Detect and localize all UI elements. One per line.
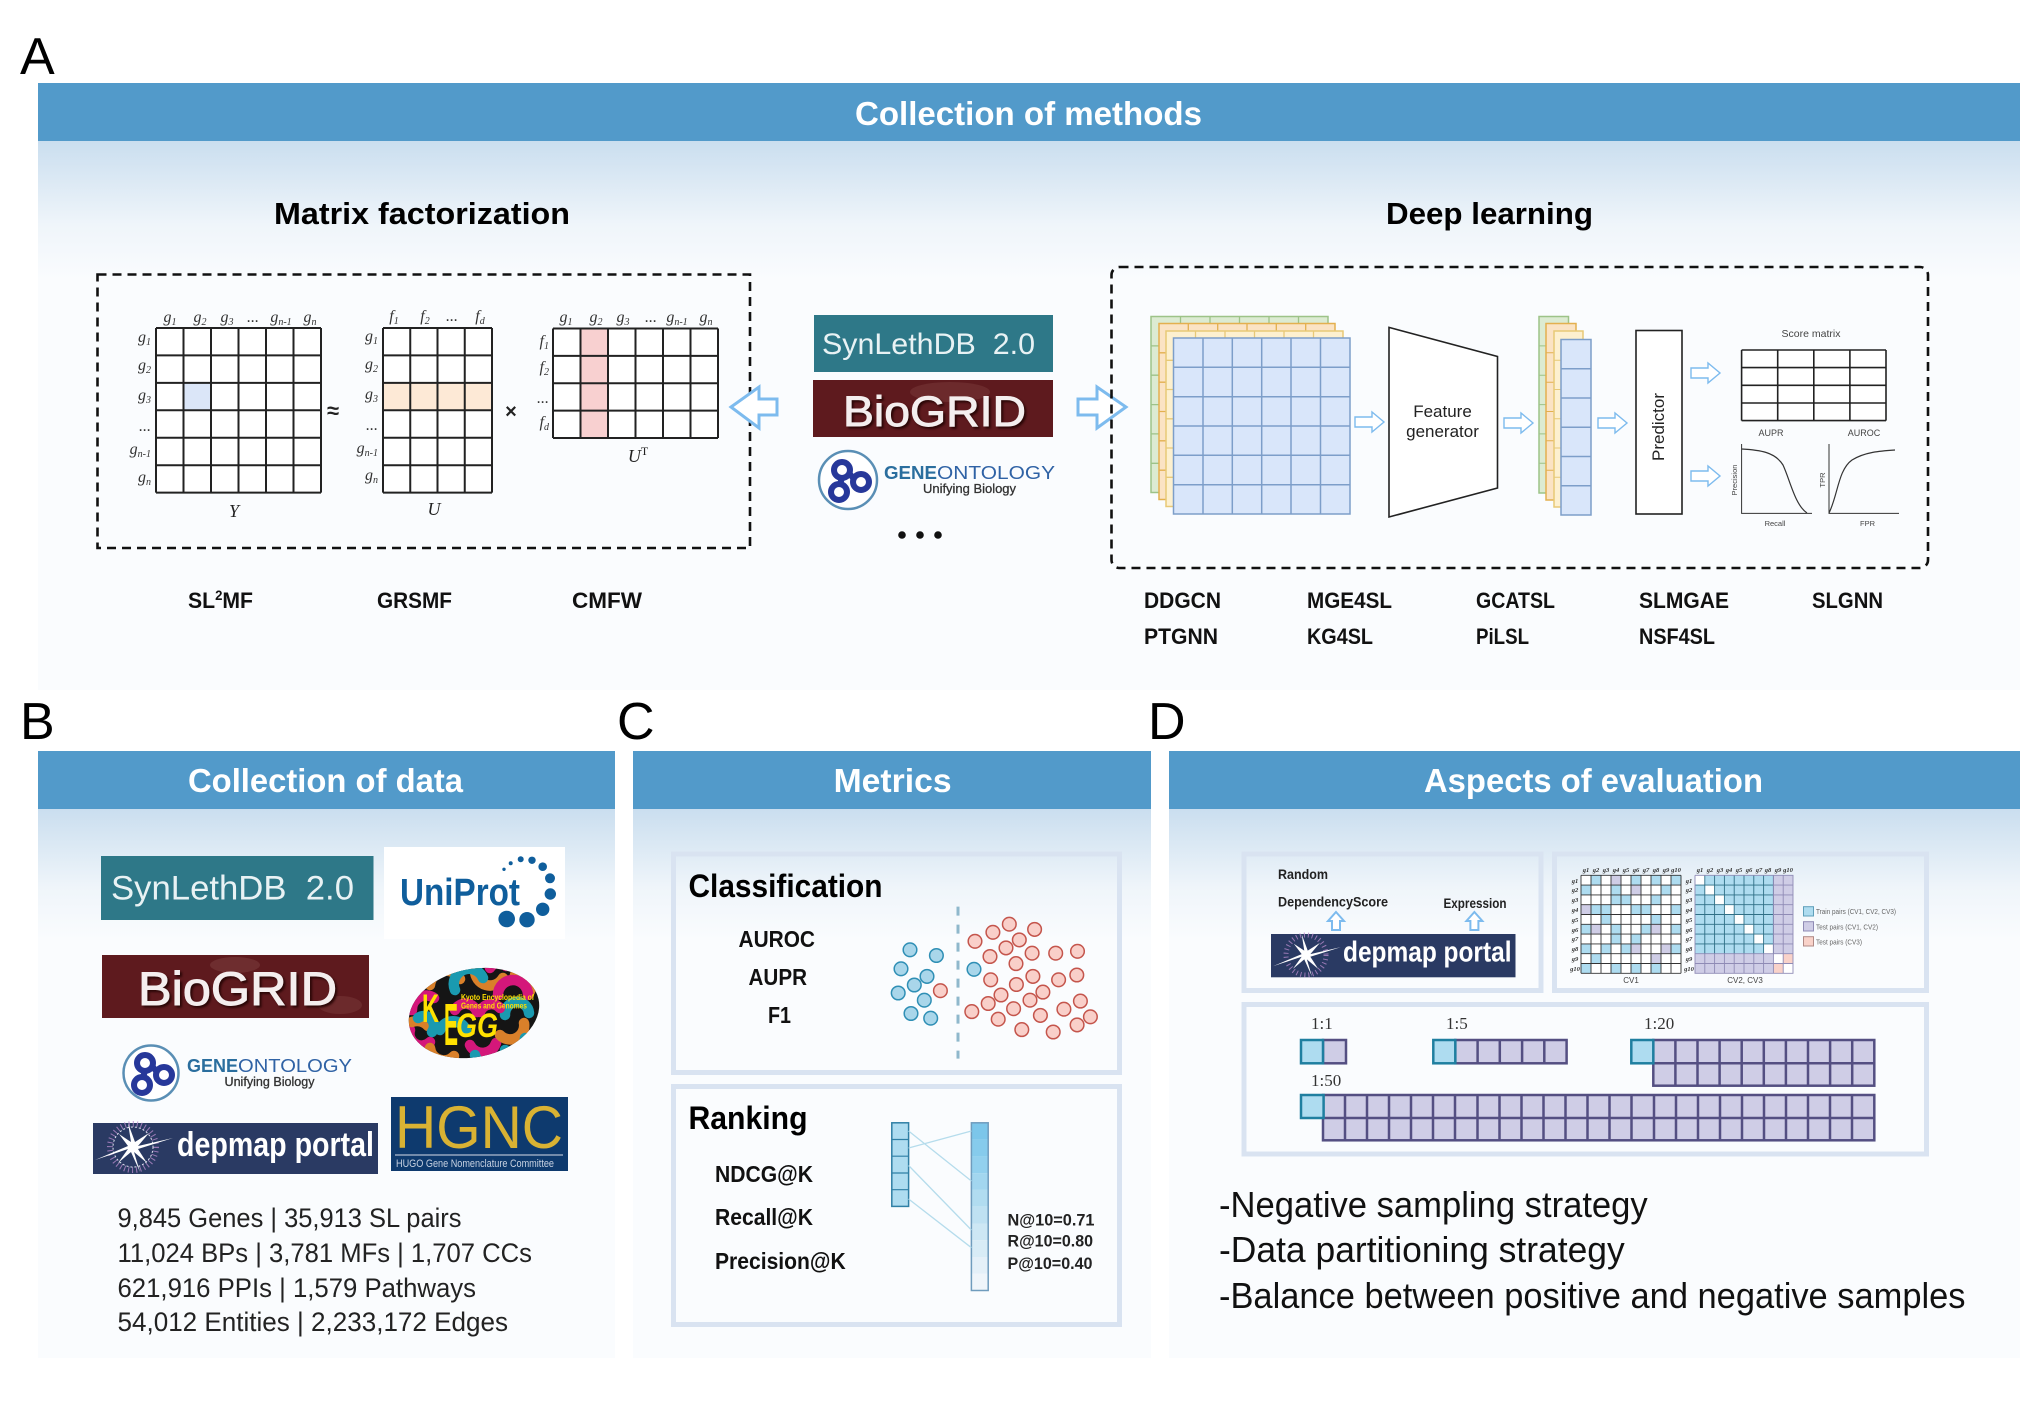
panel C: metrics	[633, 751, 1151, 1358]
matrix CV1: g8	[1652, 867, 1660, 874]
score matrix: Score matrix	[1782, 328, 1841, 340]
ratio 1:5	[1433, 1014, 1567, 1063]
matrix CV2 and CV3: g2	[1706, 867, 1714, 874]
ratio 1:20: 1:20	[1644, 1014, 1674, 1033]
matrix CV1: g10	[1569, 966, 1581, 973]
panel D: aspects of evaluation	[1169, 751, 2020, 1358]
legend: Test pairs (CV1, CV2)	[1816, 922, 1878, 932]
logo: SynLethDB	[101, 856, 374, 920]
matrix CV1	[1569, 867, 1682, 985]
matrix CV2 and CV3: g6	[1685, 927, 1693, 934]
logo: HGNC: HGNC	[395, 1094, 563, 1161]
logo: BioGRID in panel A: BioGRID	[843, 388, 1026, 436]
panel label B: B	[20, 693, 55, 751]
matrix U transpose: g	[700, 309, 708, 326]
logo: SynLethDB in panel A	[814, 315, 1053, 372]
matrix CV2 and CV3: g7	[1755, 867, 1763, 874]
ratio 1:1: 1:1	[1311, 1014, 1333, 1033]
box: negative sampling sources	[1244, 854, 1541, 990]
ranking metric values	[1008, 1211, 1094, 1273]
matrix U: U	[428, 499, 442, 519]
ranking metric names: Recall@K	[715, 1204, 813, 1230]
ratio 1:5: 1:5	[1446, 1014, 1468, 1033]
logo: depmap portal: depmap portal	[177, 1126, 374, 1164]
matrix U transpose: d	[544, 422, 550, 433]
matrix CV2 and CV3: g7	[1685, 936, 1693, 943]
matrix U: g	[365, 328, 373, 345]
ratio 1:50: 1:50	[1311, 1071, 1341, 1090]
legend: Train pairs (CV1, CV2, CV3)	[1816, 907, 1896, 916]
matrix Y: g	[138, 329, 146, 346]
multiplication sign: ×	[505, 401, 517, 423]
panel A: collection of methods	[38, 83, 2020, 690]
matrix CV1: g9	[1571, 956, 1579, 963]
matrix CV1: g5	[1622, 867, 1630, 874]
matrix U transpose: g	[666, 309, 674, 326]
classification metric names	[738, 926, 815, 1028]
matrix CV2 and CV3: g4	[1725, 867, 1733, 874]
classification metric names: AUROC	[738, 926, 815, 952]
matrix U: d	[480, 316, 486, 327]
ranking box: Ranking	[688, 1100, 808, 1136]
stacked feature matrices	[1151, 316, 1350, 514]
feature generator trapezoid	[1389, 327, 1498, 517]
matrix CV2 and CV3: g9	[1685, 956, 1693, 963]
matrix U transpose: f	[540, 414, 544, 431]
deep learning method names: NSF4SL	[1639, 624, 1715, 649]
ratio 1:20	[1631, 1014, 1874, 1086]
dashed box: deep learning diagram	[1112, 267, 1928, 568]
matrix U transpose: 1	[568, 317, 572, 328]
matrix Y: g	[138, 357, 146, 374]
logo: depmap portal	[93, 1123, 378, 1174]
matrix U: g	[365, 467, 373, 484]
matrix Y: 2	[202, 317, 206, 328]
logo: Gene Ontology in panel A: ONTOLOGY	[937, 462, 1055, 483]
matrix U transpose: ...	[645, 309, 657, 326]
matrix U transpose: n-1	[674, 317, 688, 328]
matrix CV1: g6	[1632, 867, 1640, 874]
logo: depmap portal: depmap portal	[1343, 937, 1512, 969]
logo: KEGG: E	[444, 992, 458, 1058]
up arrow to dependency score	[1328, 912, 1344, 930]
matrix factorization method names: MF	[222, 588, 253, 613]
ellipsis dots	[898, 531, 942, 539]
matrix Y: g	[194, 309, 202, 326]
matrix CV2 and CV3: g5	[1685, 917, 1693, 924]
ranking metric values: N@10=0.71	[1008, 1211, 1094, 1229]
matrix CV1: g4	[1612, 867, 1620, 874]
ranking metric names	[715, 1161, 846, 1274]
arrow: data to deep learning	[1078, 387, 1126, 428]
AUROC chart: TPR	[1818, 472, 1827, 488]
deep learning method names: SLMGAE	[1639, 588, 1729, 613]
matrix U transpose: 1	[544, 341, 549, 352]
matrix Y: 1	[172, 317, 176, 328]
classification metric names: F1	[768, 1002, 791, 1028]
heading: matrix factorization: Matrix factorization	[274, 196, 570, 231]
classification metric names: AUPR	[748, 964, 807, 990]
header bar: collection of methods: Collection of methods	[855, 95, 1202, 132]
matrix CV2 and CV3: g4	[1685, 907, 1693, 914]
matrix U transpose: ...	[537, 390, 549, 407]
data statistics: 9,845 Genes | 35,913 SL pairs	[118, 1203, 462, 1233]
matrix Y: n	[146, 477, 151, 488]
matrix CV1: g4	[1571, 907, 1579, 914]
matrix U transpose: g	[560, 309, 568, 326]
dashed box: matrix factorization diagram	[98, 274, 750, 548]
approximately equal sign: ≈	[327, 398, 339, 423]
header bar: metrics	[633, 751, 1151, 809]
logo: Gene Ontology in panel A	[819, 451, 1055, 509]
matrix CV2 and CV3: g10	[1683, 966, 1695, 973]
matrix factorization method names: SL	[188, 588, 217, 613]
deep learning method names: PTGNN	[1144, 624, 1218, 649]
AUPR chart: AUPR	[1758, 428, 1784, 438]
feature generator trapezoid: generator	[1406, 422, 1479, 441]
matrix CV2 and CV3: g2	[1685, 887, 1693, 894]
classification box: Classification	[688, 868, 882, 904]
predictor box: Predictor	[1649, 393, 1668, 461]
matrix CV2 and CV3: g8	[1685, 946, 1693, 953]
up arrow to expression	[1466, 912, 1482, 930]
matrix factorization method names: GRSMF	[377, 588, 452, 613]
matrix CV2 and CV3: CV2, CV3	[1727, 976, 1763, 985]
panel label A: A	[20, 28, 55, 86]
matrix U transpose: f	[540, 359, 544, 376]
matrix CV1: g3	[1571, 897, 1579, 904]
AUPR chart: Precision	[1730, 465, 1739, 495]
logo: depmap portal	[1271, 934, 1516, 977]
logo: Gene Ontology: Unifying Biology	[224, 1075, 315, 1089]
logo: SynLethDB in panel A: SynLethDB 2.0	[822, 328, 1035, 361]
panel B: collection of data	[38, 751, 615, 1358]
matrix Y: g	[220, 309, 228, 326]
ratio 1:50	[1301, 1071, 1874, 1140]
ranking box	[674, 1086, 1120, 1324]
matrix U: 1	[394, 316, 399, 327]
matrix U: ...	[366, 417, 378, 434]
logo: KEGG: GG	[456, 1007, 498, 1045]
matrix U: 2	[425, 316, 430, 327]
data statistics	[118, 1203, 532, 1337]
header bar: collection of methods	[38, 83, 2020, 141]
deep learning method names: GCATSL	[1476, 588, 1555, 613]
deep learning method names	[1144, 588, 1883, 649]
matrix CV2 and CV3: g8	[1764, 867, 1772, 874]
matrix CV2 and CV3: g3	[1685, 897, 1693, 904]
matrix CV1: g6	[1571, 927, 1579, 934]
evaluation aspects list	[1219, 1184, 1966, 1316]
matrix Y: g	[164, 309, 172, 326]
matrix Y: g	[270, 309, 278, 326]
matrix U transpose: f	[540, 333, 544, 350]
matrix CV1: g5	[1571, 917, 1579, 924]
panel label C: C	[617, 693, 655, 751]
matrix U transpose: n	[708, 317, 712, 328]
matrix U: n	[373, 475, 378, 486]
AUPR chart: Recall	[1765, 519, 1786, 528]
matrix U: g	[365, 386, 373, 403]
matrix CV1: g1	[1582, 867, 1589, 874]
matrix U transpose	[537, 309, 718, 466]
logo: Gene Ontology in panel A: GENE	[884, 462, 937, 483]
matrix Y: g	[304, 309, 312, 326]
small arrow from feature generator	[1504, 413, 1533, 433]
matrix factorization method names: CMFW	[572, 588, 643, 613]
matrix U transpose: 2	[598, 317, 602, 328]
matrix U: n-1	[365, 448, 378, 459]
box: positive to negative ratios	[1244, 1004, 1926, 1154]
matrix CV2 and CV3: g9	[1774, 867, 1782, 874]
deep learning method names: PiLSL	[1476, 624, 1529, 649]
matrix U: f	[389, 308, 394, 325]
matrix CV1: g7	[1642, 867, 1650, 874]
box: negative sampling sources: Random	[1278, 866, 1328, 882]
header bar: collection of data	[38, 751, 615, 809]
deep learning method names: DDGCN	[1144, 588, 1221, 613]
matrix U transpose: g	[616, 309, 624, 326]
heading: deep learning: Deep learning	[1386, 196, 1593, 231]
logo: Gene Ontology: GENE	[187, 1056, 238, 1076]
matrix Y: g	[130, 441, 138, 458]
matrix Y	[130, 309, 321, 521]
header bar: aspects of evaluation	[1169, 751, 2020, 809]
matrix U transpose: g	[590, 309, 598, 326]
matrix factorization method names	[188, 587, 643, 613]
matrix CV1: CV1	[1623, 976, 1639, 985]
score matrix	[1742, 328, 1886, 421]
classification box	[674, 854, 1120, 1072]
logo: Gene Ontology in panel A: Unifying Biology	[923, 482, 1017, 496]
AUROC chart: FPR	[1860, 519, 1876, 528]
logo: UniProt	[384, 847, 565, 939]
arrow: data to matrix factorization	[731, 387, 777, 428]
matrix CV2 and CV3: g1	[1685, 878, 1692, 885]
matrix Y: Y	[229, 501, 241, 521]
AUROC chart: AUROC	[1848, 428, 1881, 438]
evaluation aspects list: -Negative sampling strategy	[1219, 1184, 1648, 1225]
matrix Y: 1	[146, 337, 151, 348]
matrix Y: 3	[228, 317, 234, 328]
matrix U: f	[475, 308, 480, 325]
matrix U transpose: U	[628, 446, 641, 466]
panel label D: D	[1148, 693, 1186, 751]
ratio 1:1	[1301, 1014, 1346, 1063]
matrix CV1: g10	[1670, 867, 1682, 874]
matrix U: ...	[446, 308, 458, 325]
stacked feature vectors	[1539, 316, 1591, 515]
matrix CV1: g1	[1571, 878, 1578, 885]
data statistics: 11,024 BPs | 3,781 MFs | 1,707 CCs	[118, 1238, 532, 1268]
matrix CV2 and CV3: g10	[1782, 867, 1794, 874]
logo: UniProt: UniProt	[400, 872, 520, 914]
logo: BioGRID in panel A	[813, 380, 1053, 437]
scatter of classified samples	[891, 907, 1097, 1059]
deep learning method names: KG4SL	[1307, 624, 1373, 649]
evaluation aspects list: -Balance between positive and negative samples	[1219, 1275, 1966, 1316]
small arrow to curves	[1691, 466, 1720, 486]
matrix Y: n	[312, 317, 316, 328]
matrix CV1: g2	[1571, 887, 1579, 894]
header bar: metrics: Metrics	[834, 762, 952, 799]
matrix Y: n-1	[138, 449, 151, 460]
ranking metric values: R@10=0.80	[1008, 1233, 1093, 1251]
logo: KEGG: Kyoto Encyclopedia of	[461, 993, 534, 1002]
matrix Y: g	[138, 387, 146, 404]
logo: Gene Ontology: ONTOLOGY	[238, 1056, 352, 1076]
ranking metric names: Precision@K	[715, 1248, 846, 1274]
matrix CV1: g7	[1571, 936, 1579, 943]
logo: SynLethDB: SynLethDB 2.0	[111, 870, 354, 908]
data statistics: 621,916 PPIs | 1,579 Pathways	[118, 1273, 476, 1303]
matrix U transpose: 2	[544, 367, 549, 378]
matrix U: 1	[373, 336, 378, 347]
matrix CV2 and CV3	[1683, 867, 1794, 985]
box: data partitioning matrices	[1554, 854, 1926, 990]
matrix Y: ...	[247, 309, 259, 326]
legend	[1804, 907, 1896, 946]
matrix Y: g	[138, 469, 146, 486]
matrix U transpose: T	[641, 444, 649, 458]
logo: BioGRID: BioGRID	[138, 962, 337, 1015]
small arrow to predictor	[1598, 413, 1627, 433]
feature generator trapezoid: Feature	[1413, 402, 1472, 421]
logo: KEGG	[408, 968, 540, 1058]
matrix CV2 and CV3: g3	[1716, 867, 1724, 874]
matrix U: 3	[372, 394, 378, 405]
box: negative sampling sources: DependencyScore	[1278, 894, 1388, 910]
matrix U: f	[420, 308, 425, 325]
matrix CV1: g3	[1602, 867, 1610, 874]
matrix CV2 and CV3: g5	[1735, 867, 1743, 874]
evaluation aspects list: -Data partitioning strategy	[1219, 1229, 1625, 1270]
matrix U: g	[365, 356, 373, 373]
AUROC chart	[1818, 428, 1899, 528]
matrix Y: 3	[145, 395, 151, 406]
logo: KEGG: K	[422, 987, 439, 1031]
logo: BioGRID	[102, 955, 369, 1018]
logo: KEGG: Genes and Genomes	[461, 1002, 527, 1010]
data statistics: 54,012 Entities | 2,233,172 Edges	[118, 1307, 508, 1337]
matrix Y: ...	[139, 418, 151, 435]
ranking metric names: NDCG@K	[715, 1161, 813, 1187]
matrix Y: 2	[146, 365, 151, 376]
header bar: aspects of evaluation: Aspects of evaluation	[1424, 762, 1763, 799]
matrix U: 2	[373, 364, 378, 375]
matrix U: g	[357, 440, 365, 457]
matrix CV1: g2	[1592, 867, 1600, 874]
deep learning method names: SLGNN	[1812, 588, 1883, 613]
ranked list diagram	[892, 1123, 988, 1290]
logo: HGNC: HUGO Gene Nomenclature Committee	[396, 1158, 554, 1170]
matrix CV2 and CV3: g1	[1696, 867, 1703, 874]
AUPR chart	[1730, 428, 1812, 528]
small arrow to score matrix	[1691, 363, 1720, 383]
matrix Y: n-1	[278, 317, 292, 328]
deep learning method names: MGE4SL	[1307, 588, 1392, 613]
header bar: collection of data: Collection of data	[188, 762, 464, 799]
matrix CV2 and CV3: g6	[1745, 867, 1753, 874]
matrix CV1: g9	[1662, 867, 1670, 874]
logo: Gene Ontology	[124, 1046, 352, 1100]
predictor box	[1636, 330, 1682, 514]
small arrow to feature generator	[1355, 412, 1384, 432]
matrix factorization method names: 2	[215, 587, 223, 603]
legend: Test pairs (CV3)	[1816, 938, 1862, 946]
matrix U transpose: 3	[624, 317, 630, 328]
matrix U	[357, 308, 492, 519]
box: negative sampling sources: Expression	[1444, 895, 1506, 911]
ranking metric values: P@10=0.40	[1008, 1255, 1092, 1273]
matrix CV1: g8	[1571, 946, 1579, 953]
